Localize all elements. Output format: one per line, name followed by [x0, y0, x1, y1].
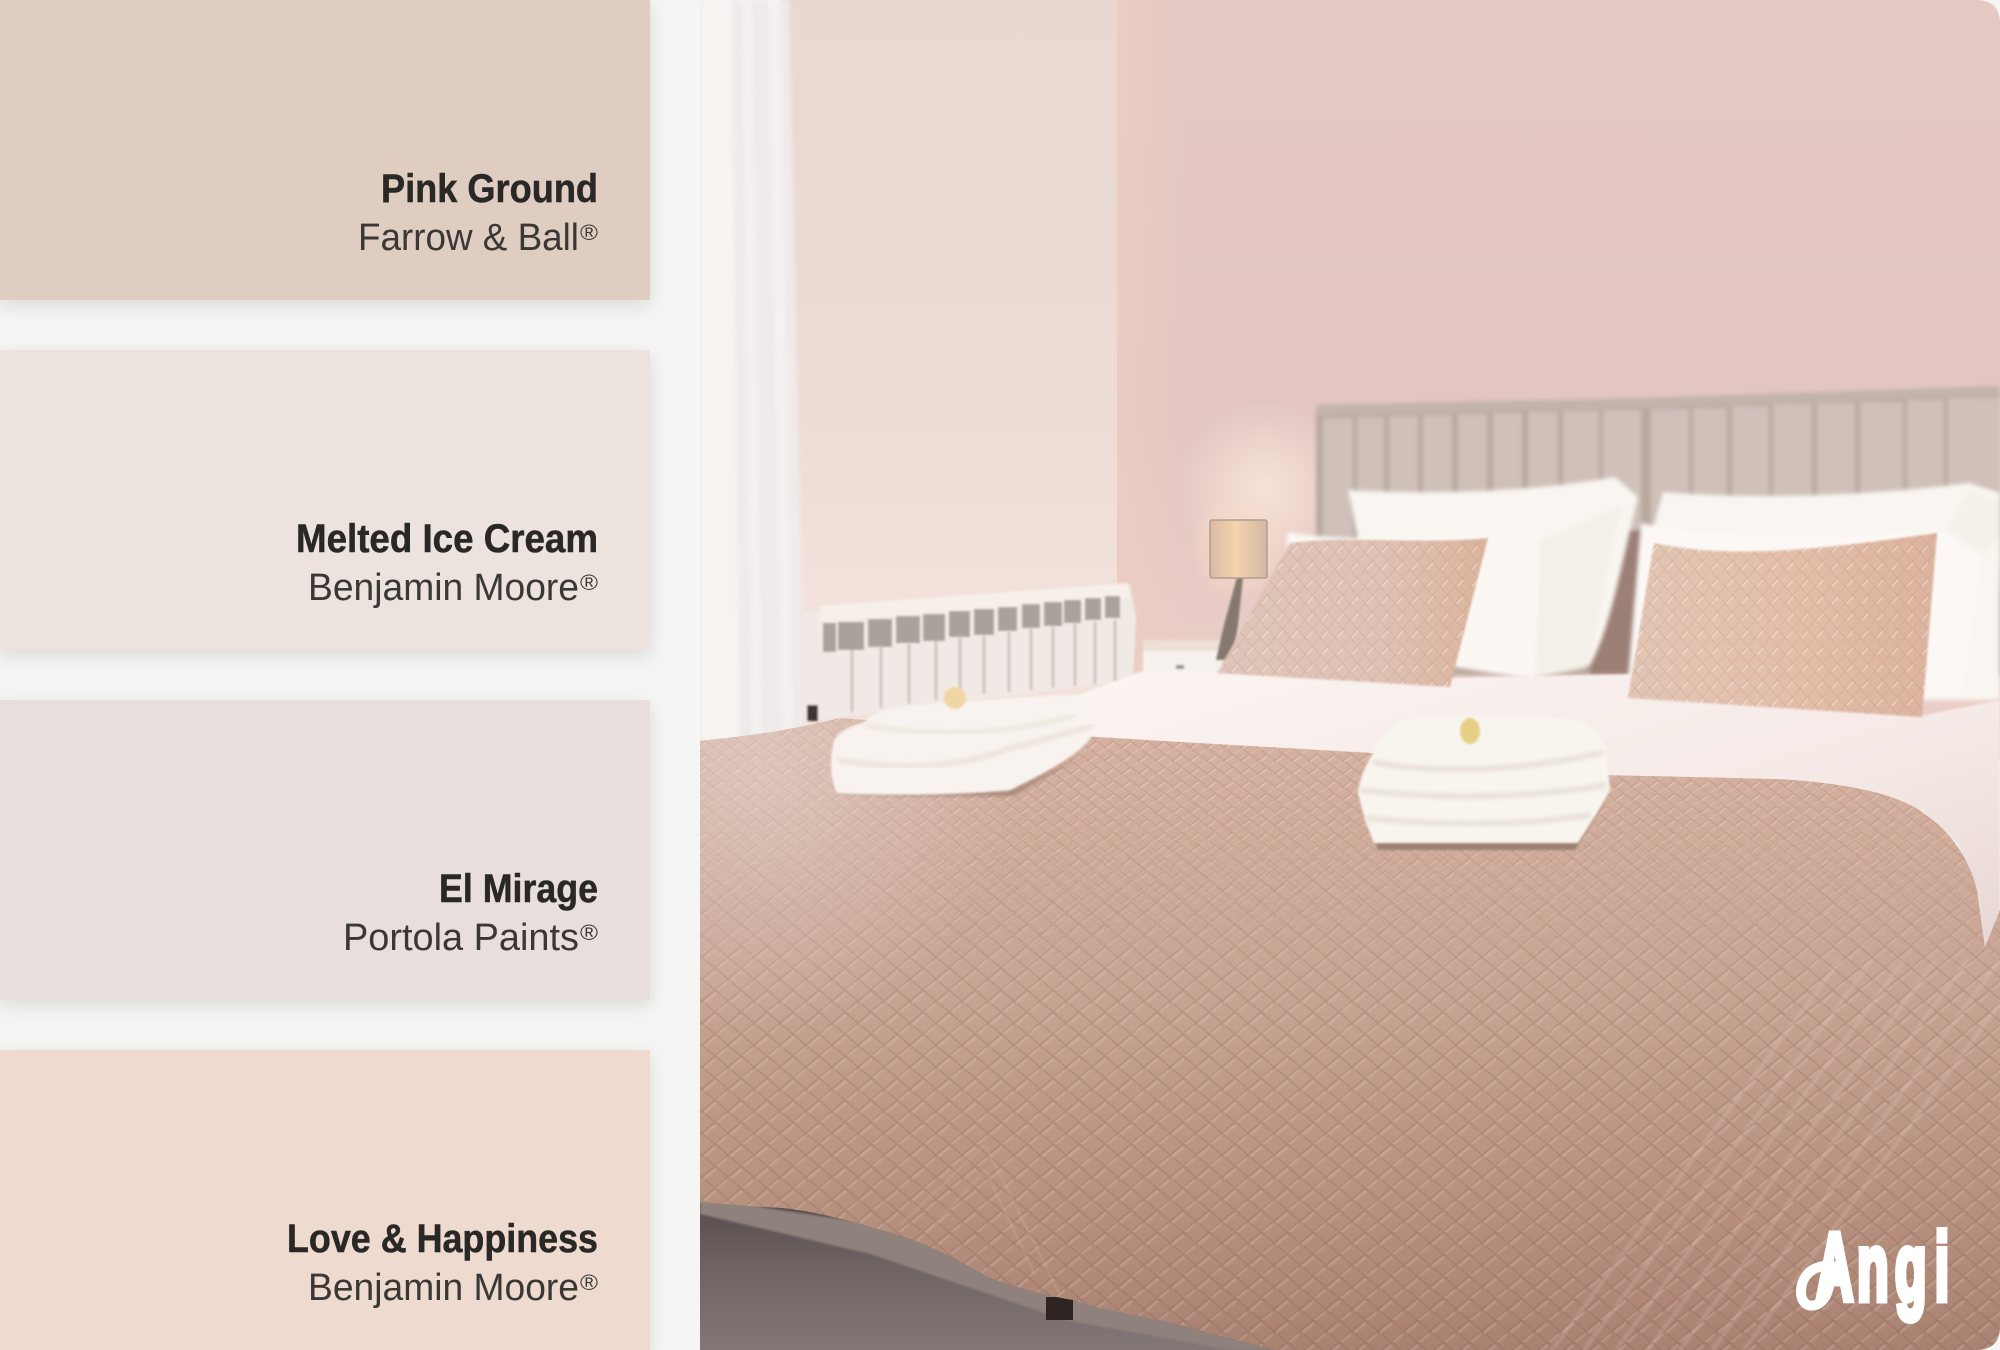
swatch: Melted Ice Cream: Benjamin Moore: [308, 567, 579, 609]
swatch: El Mirage: El Mirage: [439, 867, 598, 911]
radiator vent fins: [823, 596, 1120, 652]
swatch: Pink Ground: ®: [580, 220, 598, 245]
swatch: El Mirage: Portola Paints: [343, 917, 579, 959]
table lamp: [1206, 519, 1268, 662]
swatch: Love & Happiness: [0, 1050, 650, 1350]
nightstand: [1142, 640, 1224, 673]
panel: bedroom photo illustration: [695, 0, 2000, 1350]
right cushion: [1628, 533, 1937, 717]
left towel stack: [831, 687, 1096, 796]
right wall: [1115, 0, 2000, 760]
white pillows: [1287, 477, 2000, 700]
swatch: Pink Ground: [0, 0, 650, 300]
soap: [1460, 718, 1480, 744]
swatch: Love & Happiness: ®: [580, 1270, 598, 1295]
swatch: Pink Ground: Farrow & Ball: [358, 217, 579, 259]
swatch: Love & Happiness: Love & Happiness: [287, 1217, 598, 1261]
swatch: El Mirage: [0, 700, 650, 1000]
soap: [944, 687, 966, 709]
Angi logo: Angi: [1816, 1214, 1949, 1321]
swatch: Melted Ice Cream: [0, 350, 650, 650]
panel: paint swatches: [0, 0, 650, 1350]
swatch: El Mirage: ®: [580, 920, 598, 945]
bed sheet: [1060, 672, 2000, 950]
quilted bedspread: [700, 718, 2000, 1350]
carpet: [700, 1202, 1275, 1350]
bedspread border stripes: [1552, 960, 2000, 1350]
bedspread fold chevron: [900, 1145, 1060, 1295]
bed base: [700, 1198, 1280, 1350]
radiator: [803, 583, 1136, 722]
swatch: Melted Ice Cream: ®: [580, 570, 598, 595]
swatch: Pink Ground: Pink Ground: [381, 167, 598, 211]
curtain: [695, 0, 805, 755]
swatch: Melted Ice Cream: Melted Ice Cream: [296, 517, 598, 561]
left cushion: [1217, 538, 1488, 687]
right towel stack: [1358, 716, 1610, 850]
left wall: [780, 0, 1117, 760]
headboard: [1316, 386, 2000, 675]
swatch: Love & Happiness: Benjamin Moore: [308, 1267, 579, 1309]
